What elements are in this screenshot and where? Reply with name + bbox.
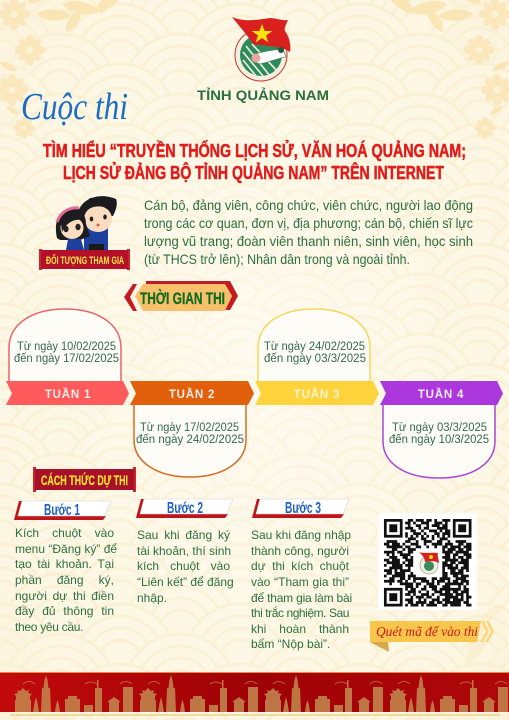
text block: participants: (từ THCS trở lên); Nhân dân trong và ngoài tỉnh. [144, 251, 410, 267]
heading: contest time: THỜI GIAN THI [140, 289, 225, 308]
text block: step 2 [137, 528, 234, 605]
text block: step 1: đầy đủ thông tin [15, 604, 114, 618]
text block: step 1: theo yêu cầu. [15, 620, 83, 634]
text block: step 3: dự thi kích chuột [251, 559, 349, 573]
tab: step 2: Bước 2 [167, 500, 203, 517]
timeline arrow: week 1: TUẦN 1 [45, 388, 91, 401]
panel: week 3 dates [258, 309, 370, 382]
footer skyline band [0, 672, 509, 716]
timeline arrow: week 2 [130, 381, 254, 405]
timeline arrow: week 4: TUẦN 4 [418, 388, 464, 401]
banner: scan prompt [370, 621, 494, 652]
banner: how to enter [33, 467, 136, 492]
text block: participants: Cán bộ, đảng viên, công chức, viên chức, người lao động [144, 197, 473, 213]
text block: step 1: phần đăng ký, [15, 573, 114, 587]
text block: step 2: Sau khi đăng ký [137, 528, 230, 542]
timeline arrow: week 1 [6, 381, 129, 405]
panel: week 2 dates: đến ngày 24/02/2025 [136, 434, 244, 446]
main title [43, 140, 466, 183]
text block: step 3: vào “Tham gia thi” [251, 575, 349, 589]
panel: week 3 dates: đến ngày 03/3/2025 [264, 353, 366, 365]
text block: step 3 [251, 528, 352, 651]
text block: step 2: kích chuột vào [137, 559, 230, 573]
text block: step 1: người dự thi điền [15, 589, 114, 603]
text block: step 1 [15, 526, 117, 634]
text block: step 1: tạo tài khoản. Tại [15, 557, 114, 571]
text block: step 2: “Liên kết” để đăng [137, 575, 234, 589]
panel: week 1 dates: Từ ngày 10/02/2025 [17, 341, 116, 353]
panel: week 3 dates: Từ ngày 24/02/2025 [264, 341, 365, 353]
tab: step 3: Bước 3 [285, 500, 321, 517]
panel: week 4 dates [383, 404, 495, 478]
text block: step 3: Sau khi đăng nhập [251, 528, 351, 542]
tab: step 1 [14, 501, 111, 520]
tab: step 2 [136, 499, 233, 518]
timeline arrow: week 3 [255, 381, 379, 405]
QR code [378, 513, 477, 610]
text block: step 3: thành công, người [251, 544, 349, 558]
banner: scan prompt: Quét mã để vào thi [376, 625, 478, 640]
timeline arrow: week 4 [380, 381, 503, 405]
text block: participants: trong các cơ quan, đơn vị, địa phương; cán bộ, chiến sĩ lực [144, 215, 473, 231]
text block: step 1: menu “Đăng ký” để [15, 542, 117, 556]
heading: contest time [124, 281, 238, 311]
banner: participants [39, 249, 130, 270]
floral decoration lower right [458, 602, 507, 667]
tab: step 1: Bước 1 [44, 502, 80, 519]
heading: province name: TỈNH QUẢNG NAM [197, 87, 329, 103]
floral corner top left [0, 0, 127, 139]
banner: how to enter: CÁCH THỨC DỰ THI [41, 471, 128, 488]
panel: week 1 dates [9, 309, 121, 382]
heading: script title: Cuộc thi [21, 86, 128, 128]
panel: week 2 dates: Từ ngày 17/02/2025 [140, 422, 239, 434]
text block: participants: lượng vũ trang; đoàn viên thanh niên, sinh viên, học sinh [144, 233, 473, 249]
text block: step 2: nhập. [137, 591, 167, 605]
panel: week 4 dates: Từ ngày 03/3/2025 [392, 422, 487, 434]
logo [232, 17, 290, 81]
text block: step 1: Kích chuột vào [15, 526, 114, 540]
timeline arrow: week 2: TUẦN 2 [169, 388, 215, 401]
text block: step 3: bấm “Nộp bài”. [251, 637, 330, 651]
text block: step 3: khi hoàn thành [251, 622, 349, 636]
text block: participants [144, 197, 473, 267]
tab: step 3 [252, 499, 349, 518]
panel: week 2 dates [134, 404, 246, 477]
text block: step 2: tài khoản, thí sinh [137, 544, 231, 558]
panel: week 4 dates: đến ngày 10/3/2025 [389, 434, 489, 446]
illustration: two youth union characters [56, 196, 117, 250]
timeline arrow: week 3: TUẦN 3 [294, 388, 340, 401]
panel: week 1 dates: đến ngày 17/02/2025 [14, 353, 119, 365]
banner: participants: ĐỐI TƯỢNG THAM GIA [46, 253, 124, 267]
floral corner top right [382, 0, 509, 139]
text block: step 3: thi trắc nghiệm. Sau [251, 606, 349, 620]
text block: step 3: để tham gia làm bài [251, 591, 352, 605]
